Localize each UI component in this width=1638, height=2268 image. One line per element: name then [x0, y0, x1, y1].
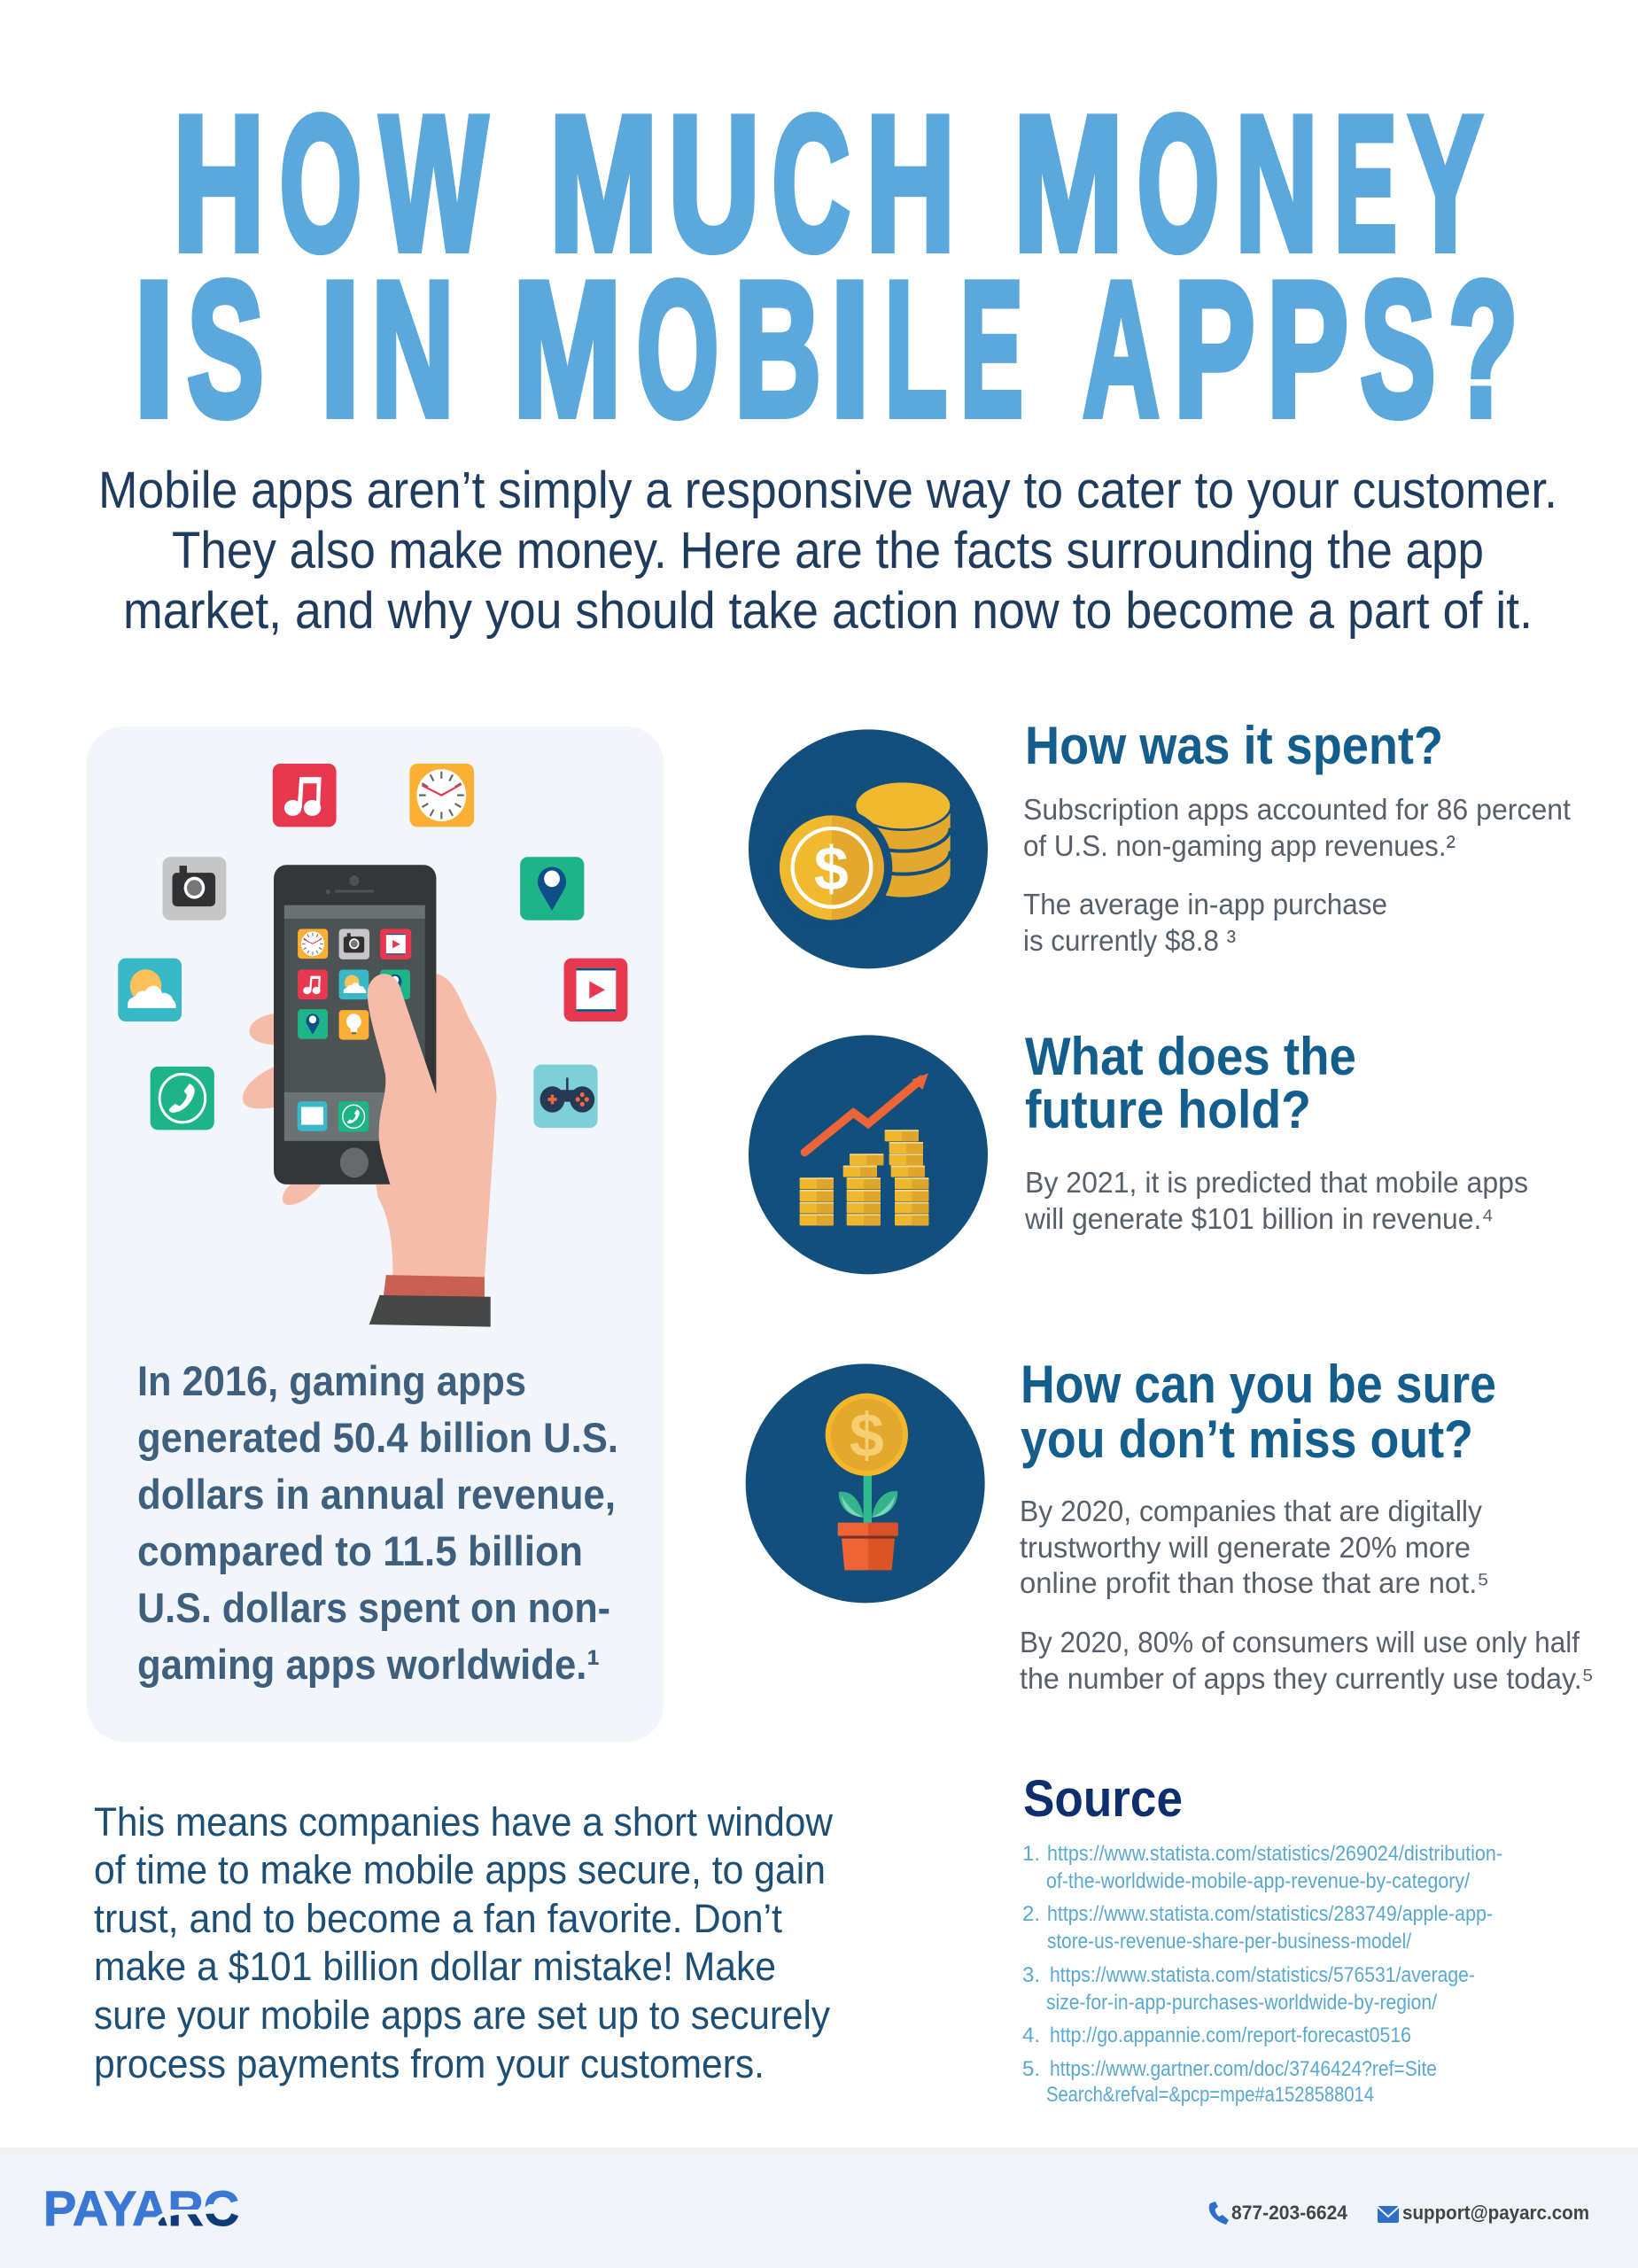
source links: 4. [1022, 2023, 1040, 2047]
section: how was it spent [1023, 716, 1571, 957]
title: M [549, 76, 658, 291]
logo: PAYARC [43, 2180, 239, 2236]
body text: By 2021, it is predicted that mobile apps [1025, 1166, 1528, 1199]
icon: camera [163, 857, 226, 920]
title: E [960, 241, 1023, 455]
body text: The average in-app purchase [1023, 888, 1387, 920]
icon: music [273, 764, 337, 827]
panel: phone illustration and gaming stat [87, 726, 664, 1742]
title: W [380, 76, 487, 291]
icon: video [564, 959, 627, 1021]
body text: trustworthy will generate 20% more [1020, 1531, 1471, 1564]
heading: What does the [1025, 1027, 1356, 1086]
closing text block: sure your mobile apps are set up to securely [94, 1992, 830, 2038]
title: ? [1448, 241, 1518, 455]
gaming stat text: U.S. dollars spent on non- [137, 1584, 610, 1631]
icon: game controller [533, 1065, 598, 1128]
body text [1024, 1166, 1528, 1235]
body text: online profit than those that are not.⁵ [1020, 1566, 1489, 1599]
icon: coins in circle [749, 729, 988, 968]
source links [1022, 1842, 1502, 2107]
title: O [1137, 76, 1219, 291]
body text: the number of apps they currently use today.⁵ [1020, 1662, 1594, 1695]
source heading: Source [1023, 1770, 1183, 1828]
title: A [1083, 241, 1159, 455]
body text: Subscription apps accounted for 86 percent [1023, 793, 1571, 826]
title: H [866, 76, 955, 291]
source links: 1. [1022, 1842, 1040, 1866]
section: what does the future hold [1024, 1027, 1528, 1235]
sleeve [369, 1295, 491, 1327]
title: I [320, 241, 361, 455]
icon: weather [118, 959, 182, 1021]
title: M [513, 241, 622, 455]
heading: How can you be sure [1021, 1355, 1496, 1414]
intro text block: They also make money. Here are the facts surrounding the app [172, 522, 1484, 579]
source links: https://www.statista.com/statistics/283749/apple-app- [1047, 1902, 1493, 1926]
title: L [884, 241, 947, 455]
source links: http://go.appannie.com/report-forecast0516 [1050, 2023, 1411, 2047]
source links: https://www.gartner.com/doc/3746424?ref=Site [1050, 2057, 1437, 2081]
gaming stat text: compared to 11.5 billion [137, 1527, 583, 1574]
closing text block: process payments from your customers. [94, 2041, 765, 2086]
intro text block: market, and why you should take action now to become a part of it. [123, 582, 1533, 640]
heading: future hold? [1025, 1080, 1311, 1139]
source links: 3. [1022, 1963, 1040, 1987]
closing text block [94, 1799, 833, 2086]
gaming stat text: In 2016, gaming apps [137, 1357, 526, 1404]
footer bar [0, 2148, 1638, 2268]
title: N [372, 241, 454, 455]
icon: map pin [520, 857, 584, 920]
intro text block [98, 462, 1557, 640]
hand [368, 974, 496, 1277]
icon: money plant in circle [746, 1363, 985, 1603]
footer [0, 2148, 1638, 2268]
body text [1023, 793, 1571, 957]
title: I [830, 241, 870, 455]
source list [1022, 1770, 1502, 2107]
heading [1021, 1355, 1496, 1469]
email address: support@payarc.com [1402, 2202, 1589, 2224]
body text: will generate $101 billion in revenue.⁴ [1024, 1202, 1494, 1235]
heading: you don’t miss out? [1021, 1410, 1473, 1469]
icon: money plant in circle: $ [850, 1401, 884, 1470]
body text: By 2020, 80% of consumers will use only half [1020, 1626, 1580, 1658]
title: B [734, 241, 821, 455]
title: H [174, 76, 264, 291]
gaming stat text: gaming apps worldwide.¹ [137, 1641, 600, 1688]
title: O [280, 76, 361, 291]
phone [274, 865, 436, 1184]
source links: of-the-worldwide-mobile-app-revenue-by-category/ [1046, 1869, 1470, 1893]
closing text block: make a $101 billion dollar mistake! Make [94, 1944, 776, 1989]
phone screen [284, 905, 425, 1141]
icon: coins in circle: $ [814, 834, 849, 903]
source links: 2. [1022, 1902, 1040, 1926]
illustration: hand holding phone with app icons [118, 764, 627, 1327]
source links: Search&refval=&pcp=mpe#a1528588014 [1046, 2083, 1374, 2107]
logo [46, 2190, 239, 2226]
title: S [1361, 241, 1435, 455]
gaming stat text [137, 1357, 618, 1688]
title [134, 76, 1518, 455]
source links: 5. [1022, 2057, 1040, 2081]
source links: https://www.statista.com/statistics/269024/distribution- [1047, 1842, 1502, 1866]
title: Y [1409, 76, 1482, 291]
icon: clock [409, 764, 474, 827]
closing text block: of time to make mobile apps secure, to gain [94, 1847, 826, 1892]
heading: How was it spent? [1025, 716, 1443, 775]
body text: is currently $8.8 ³ [1023, 924, 1236, 957]
title: S [187, 241, 264, 455]
icon: email [1378, 2206, 1399, 2223]
source links: size-for-in-app-purchases-worldwide-by-region/ [1046, 1991, 1437, 2015]
title: E [1334, 76, 1397, 291]
closing text block: This means companies have a short window [94, 1799, 833, 1845]
source links: https://www.statista.com/statistics/576531/average- [1050, 1963, 1475, 1987]
icon: growth chart in circle [749, 1035, 988, 1274]
shirt cuff [384, 1275, 485, 1297]
gaming stat text: generated 50.4 billion U.S. [137, 1414, 618, 1461]
logo: PAYARC [43, 2180, 239, 2236]
body text [1020, 1495, 1594, 1695]
section: how can you be sure [1020, 1355, 1594, 1695]
title: C [772, 76, 850, 291]
title: U [668, 76, 760, 291]
icon: phone call [151, 1067, 214, 1130]
heading [1025, 1027, 1356, 1139]
body text: By 2020, companies that are digitally [1020, 1495, 1482, 1527]
back fingers [243, 1014, 323, 1205]
phone number: 877-203-6624 [1231, 2202, 1348, 2224]
intro text block: Mobile apps aren’t simply a responsive way to cater to your customer. [98, 462, 1557, 519]
icon: phone [1209, 2202, 1229, 2225]
title: O [637, 241, 718, 455]
body text: of U.S. non-gaming app revenues.² [1023, 829, 1456, 862]
title: N [1235, 76, 1318, 291]
title: P [1267, 241, 1348, 455]
title: M [1013, 76, 1123, 291]
gaming stat text: dollars in annual revenue, [137, 1471, 616, 1518]
closing text block: trust, and to become a fan favorite. Don’t [94, 1896, 782, 1941]
panel background [87, 726, 664, 1742]
mini app icons on screen [298, 929, 411, 1131]
title: I [134, 241, 175, 455]
source links: store-us-revenue-share-per-business-model/ [1047, 1930, 1411, 1953]
title: P [1174, 241, 1255, 455]
